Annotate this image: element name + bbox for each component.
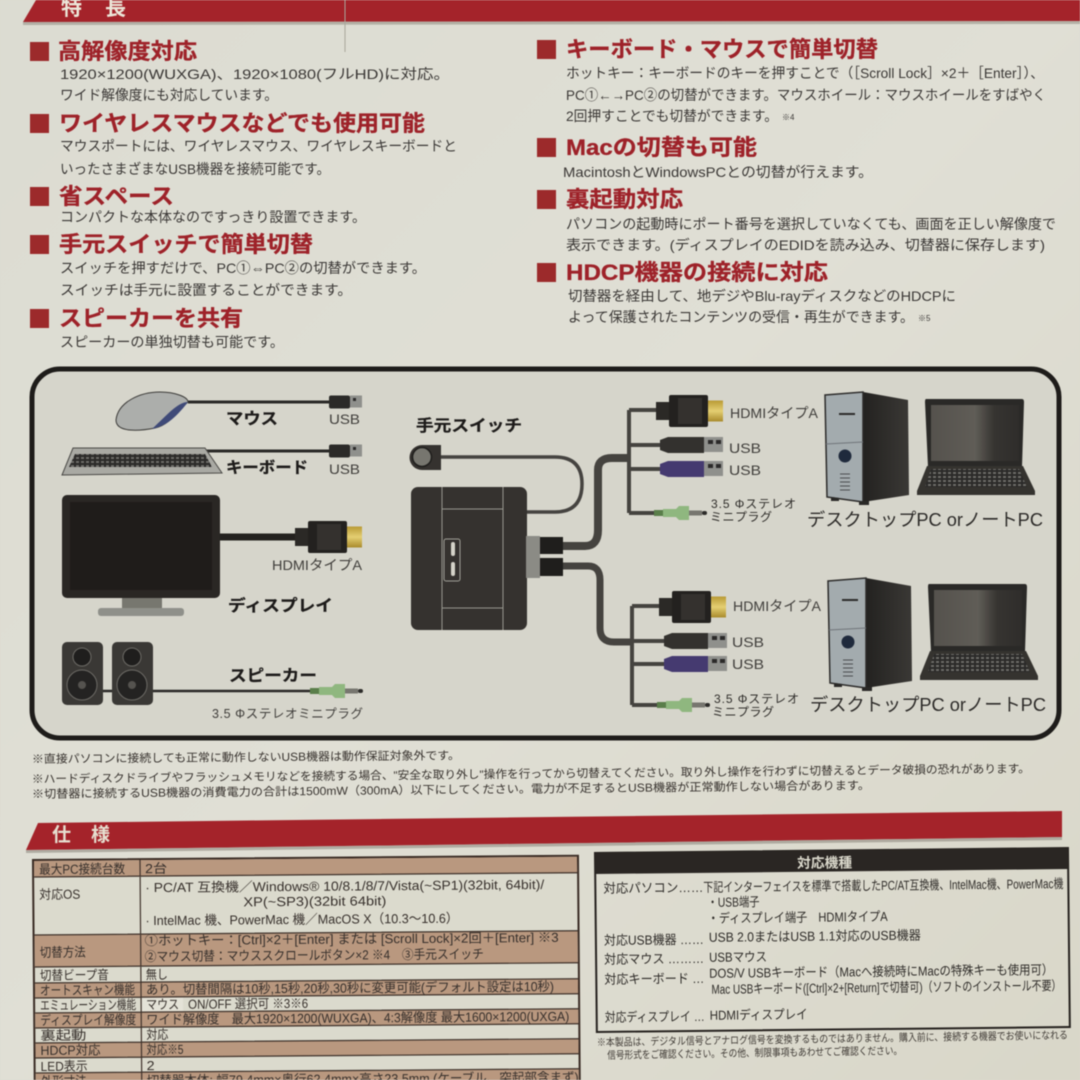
- keyboard: キーボード: [226, 459, 308, 477]
- feature: Mac switching: Macの切替も可能: [566, 135, 757, 160]
- row: supported USB devices: [604, 928, 921, 948]
- row: switching method: 切替方法: [40, 945, 86, 960]
- row: supported USB devices: USB 2.0またはUSB 1.1対応のUSB機器: [709, 928, 921, 945]
- row: supported PCs: ・ディスプレイ端子 HDMIタイプA: [708, 909, 888, 926]
- feature: HDCP: ※5: [918, 314, 931, 323]
- feature: HDCP: 切替器を経由して、地デジやBlu-rayディスクなどのHDCPに: [568, 288, 956, 304]
- panel header: 対応機種: [797, 854, 852, 871]
- feature: keyboard and mouse switching: [537, 37, 1046, 124]
- row: emulation: [40, 996, 308, 1013]
- row: display resolution: ディスプレイ解像度: [40, 1012, 136, 1028]
- panel header: [595, 848, 1068, 874]
- feature: Mac switching: [537, 135, 873, 180]
- row: supported PCs: 対応パソコン……: [603, 880, 703, 896]
- feature: high resolution: 1920×1200(WUXGA)、1920×1080(フルHD)に対応。: [60, 66, 450, 82]
- feature: HDCP: よって保護されたコンテンツの受信・再生ができます。: [568, 309, 914, 325]
- feature: space saving: [30, 184, 366, 225]
- feature: HDCP: HDCP機器の接続に対応: [566, 260, 828, 285]
- row: supported OS: · PC/AT 互換機／Windows® 10/8.1/8/7/Vista(~SP1)(32bit, 64bit)/: [145, 877, 545, 895]
- row: max PCs: 最大PC接続台数: [39, 861, 125, 877]
- connectors: PC 1: HDMIタイプA: [730, 405, 819, 421]
- feature: wireless mouse: ワイヤレスマウスなどでも使用可能: [59, 111, 425, 136]
- row: background boot: 対応: [146, 1027, 168, 1042]
- footnote: [597, 1029, 1068, 1062]
- row: supported display: 対応ディスプレイ …: [605, 1009, 705, 1025]
- feature: background boot: 表示できます。(ディスプレイのEDIDを読み込み、切替器に保存します): [566, 237, 1045, 253]
- feature: keyboard and mouse switching: ※4: [782, 113, 795, 122]
- feature column: right: [537, 37, 1056, 325]
- speakers: [62, 642, 363, 721]
- row: supported display: HDMIディスプレイ: [710, 1007, 808, 1023]
- panel: connection diagram: [32, 369, 1059, 738]
- hand switch: [409, 416, 582, 512]
- usage notes: ※切替器に接続するUSB機器の消費電力の合計は1500mW（300mA）以下にしてください。電力が不足するとUSB機器が正常動作しない場合があります。: [32, 778, 870, 801]
- feature: hand switch: 手元スイッチで簡単切替: [59, 232, 313, 257]
- row: switching method: ①ホットキー：[Ctrl]×2＋[Enter] または [Scroll Lock]×2回＋[Enter] ※3: [145, 930, 559, 948]
- feature: high resolution: 高解像度対応: [58, 39, 197, 64]
- row: display resolution: ワイド解像度 最大1920×1200(WUXGA)、4:3解像度 最大1600×1200(UXGA): [146, 1009, 569, 1027]
- connectors: PC 2: HDMIタイプA: [733, 598, 822, 614]
- feature: hand switch: [30, 232, 426, 298]
- feature: keyboard and mouse switching: ホットキー：キーボードのキーを押すことで（［Scroll Lock］×2＋［Enter］）、: [566, 65, 1044, 81]
- display: ディスプレイ: [228, 596, 333, 615]
- feature: keyboard and mouse switching: キーボード・マウスで簡単切替: [566, 37, 878, 62]
- banner: specifications heading: [26, 811, 1062, 853]
- row: supported mouse: 対応マウス ………: [604, 951, 704, 967]
- PC 2: tower and laptop: デスクトップPC orノートPC: [810, 695, 1046, 715]
- PC 1: tower and laptop: デスクトップPC orノートPC: [807, 510, 1043, 530]
- connectors: PC 1: ミニプラグ: [710, 510, 772, 524]
- row: background boot: [40, 1027, 168, 1043]
- row: supported OS: 対応OS: [39, 887, 81, 902]
- row: background boot: 裏起動: [40, 1028, 86, 1043]
- connector block: [526, 536, 563, 578]
- usage notes: ※ハードディスクドライブやフラッシュメモリなどを接続する場合、"安全な取り外し"操作を行ってから切替えてください。取り外し操作を行わずに切替えるとデータ破損の恐れがあります。: [32, 762, 1030, 786]
- switcher box: [411, 487, 527, 630]
- feature: shared speaker: スピーカーを共有: [59, 306, 243, 331]
- cables to PCs: [563, 410, 665, 705]
- row: beep: 無し: [146, 967, 168, 982]
- connectors: PC 2: USB: [732, 634, 764, 650]
- row: LED: LED表示: [41, 1059, 88, 1074]
- row: supported USB devices: 対応USB機器 ……: [604, 932, 704, 948]
- row: supported OS: · IntelMac 機、PowerMac 機／MacOS X（10.3～10.6）: [145, 911, 459, 928]
- row: supported OS: XP(~SP3)(32bit 64bit): [243, 893, 386, 909]
- display: HDMIタイプA: [272, 557, 363, 573]
- specifications table: [33, 856, 580, 1080]
- hand switch: 手元スイッチ: [416, 416, 522, 435]
- feature: Mac switching: MacintoshとWindowsPCとの切替が行えます。: [563, 164, 873, 180]
- row: supported mouse: [604, 949, 767, 967]
- row: supported keyboard: [604, 962, 1061, 998]
- row: supported PCs: ・USB端子: [707, 894, 760, 910]
- feature: hand switch: スイッチは手元に設置することができます。: [60, 282, 352, 298]
- feature: wireless mouse: いったさまざまなUSB機器を接続可能です。: [60, 161, 330, 177]
- connectors: PC 2: ミニプラグ: [712, 705, 774, 719]
- keyboard: USB: [329, 461, 360, 477]
- usage notes: [32, 748, 1030, 801]
- row: supported PCs: [603, 876, 1064, 927]
- row: supported mouse: USBマウス: [709, 949, 767, 965]
- feature: keyboard and mouse switching: 2回押すことでも切替ができます。: [566, 108, 778, 124]
- speakers: スピーカー: [229, 667, 317, 685]
- PC 1: tower and laptop: [807, 392, 1043, 530]
- feature: background boot: 裏起動対応: [566, 187, 683, 212]
- usage notes: ※直接パソコンに接続しても正常に動作しないUSB機器は動作保証対象外です。: [32, 748, 460, 766]
- feature column: left: [30, 39, 457, 350]
- feature: shared speaker: スピーカーの単独切替も可能です。: [60, 334, 284, 350]
- PC 2: tower and laptop: [810, 578, 1046, 715]
- connectors: PC 2: USB: [732, 656, 764, 672]
- feature: background boot: パソコンの起動時にポート番号を選択していなくても、画面を正しい解像度で: [566, 216, 1056, 232]
- row: auto scan: オートスキャン機能: [40, 982, 135, 998]
- feature: wireless mouse: [30, 111, 457, 177]
- connectors: PC 2: [657, 591, 822, 719]
- row: supported keyboard: 対応キーボード …: [604, 971, 704, 987]
- feature: space saving: 省スペース: [59, 184, 174, 209]
- mouse: USB: [329, 411, 360, 427]
- footnote: 信号形式をご確認ください。その他、制限事項もあわせてご確認ください。: [607, 1044, 902, 1062]
- row: supported display: [605, 1007, 808, 1025]
- row: switching method: ②マウス切替：マウススクロールボタン×2 ※4 ③手元スイッチ: [145, 946, 484, 964]
- speakers: 3.5 Φステレオミニプラグ: [212, 707, 363, 721]
- feature: space saving: コンパクトな本体なのですっきり設置できます。: [60, 209, 366, 225]
- row: HDCP: [40, 1042, 184, 1058]
- feature: hand switch: スイッチを押すだけで、PC①⇔PC②の切替ができます。: [60, 260, 426, 276]
- feature: HDCP: [537, 260, 956, 325]
- mouse: マウス: [226, 410, 278, 428]
- connectors: PC 1: USB: [729, 462, 761, 478]
- row: supported OS: [39, 877, 545, 929]
- keyboard: [62, 444, 362, 477]
- connectors: PC 1: USB: [729, 440, 761, 456]
- row: auto scan: あり。切替間隔は10秒,15秒,20秒,30秒に変更可能(デフォルト設定は10秒): [146, 979, 554, 997]
- panel: supported devices: [595, 848, 1070, 1032]
- feature: high resolution: [30, 39, 450, 103]
- banner: specifications heading: 仕 様: [52, 824, 110, 846]
- row: beep: 切替ビープ音: [40, 967, 109, 983]
- row: HDCP: 対応※5: [146, 1042, 184, 1057]
- connectors: PC 1: 3.5 Φステレオ: [711, 497, 796, 511]
- row: switching method: [40, 930, 559, 965]
- row: LED: 2: [147, 1058, 155, 1073]
- mouse: [116, 392, 362, 430]
- feature: keyboard and mouse switching: PC①←→PC②の切替ができます。マウスホイール：マウスホイールをすばやく: [566, 87, 1046, 103]
- row: HDCP: HDCP対応: [40, 1042, 101, 1058]
- row: max PCs: 2台: [145, 861, 167, 876]
- row: beep: [40, 967, 168, 983]
- banner: features heading: [23, 0, 1080, 52]
- feature: wireless mouse: マウスポートには、ワイヤレスマウス、ワイヤレスキーボードと: [60, 138, 457, 154]
- feature: high resolution: ワイド解像度にも対応しています。: [60, 87, 278, 103]
- display: [62, 495, 363, 616]
- feature: shared speaker: [30, 306, 284, 350]
- row: emulation: ON/OFF 選択可 ※3※6: [188, 996, 308, 1012]
- row: LED: [41, 1058, 155, 1074]
- connectors: PC 2: 3.5 Φステレオ: [714, 692, 799, 706]
- feature: background boot: [537, 187, 1056, 253]
- row: emulation: マウス: [146, 997, 179, 1012]
- row: emulation: エミュレーション機能: [40, 997, 136, 1013]
- connectors: PC 1: [654, 395, 819, 524]
